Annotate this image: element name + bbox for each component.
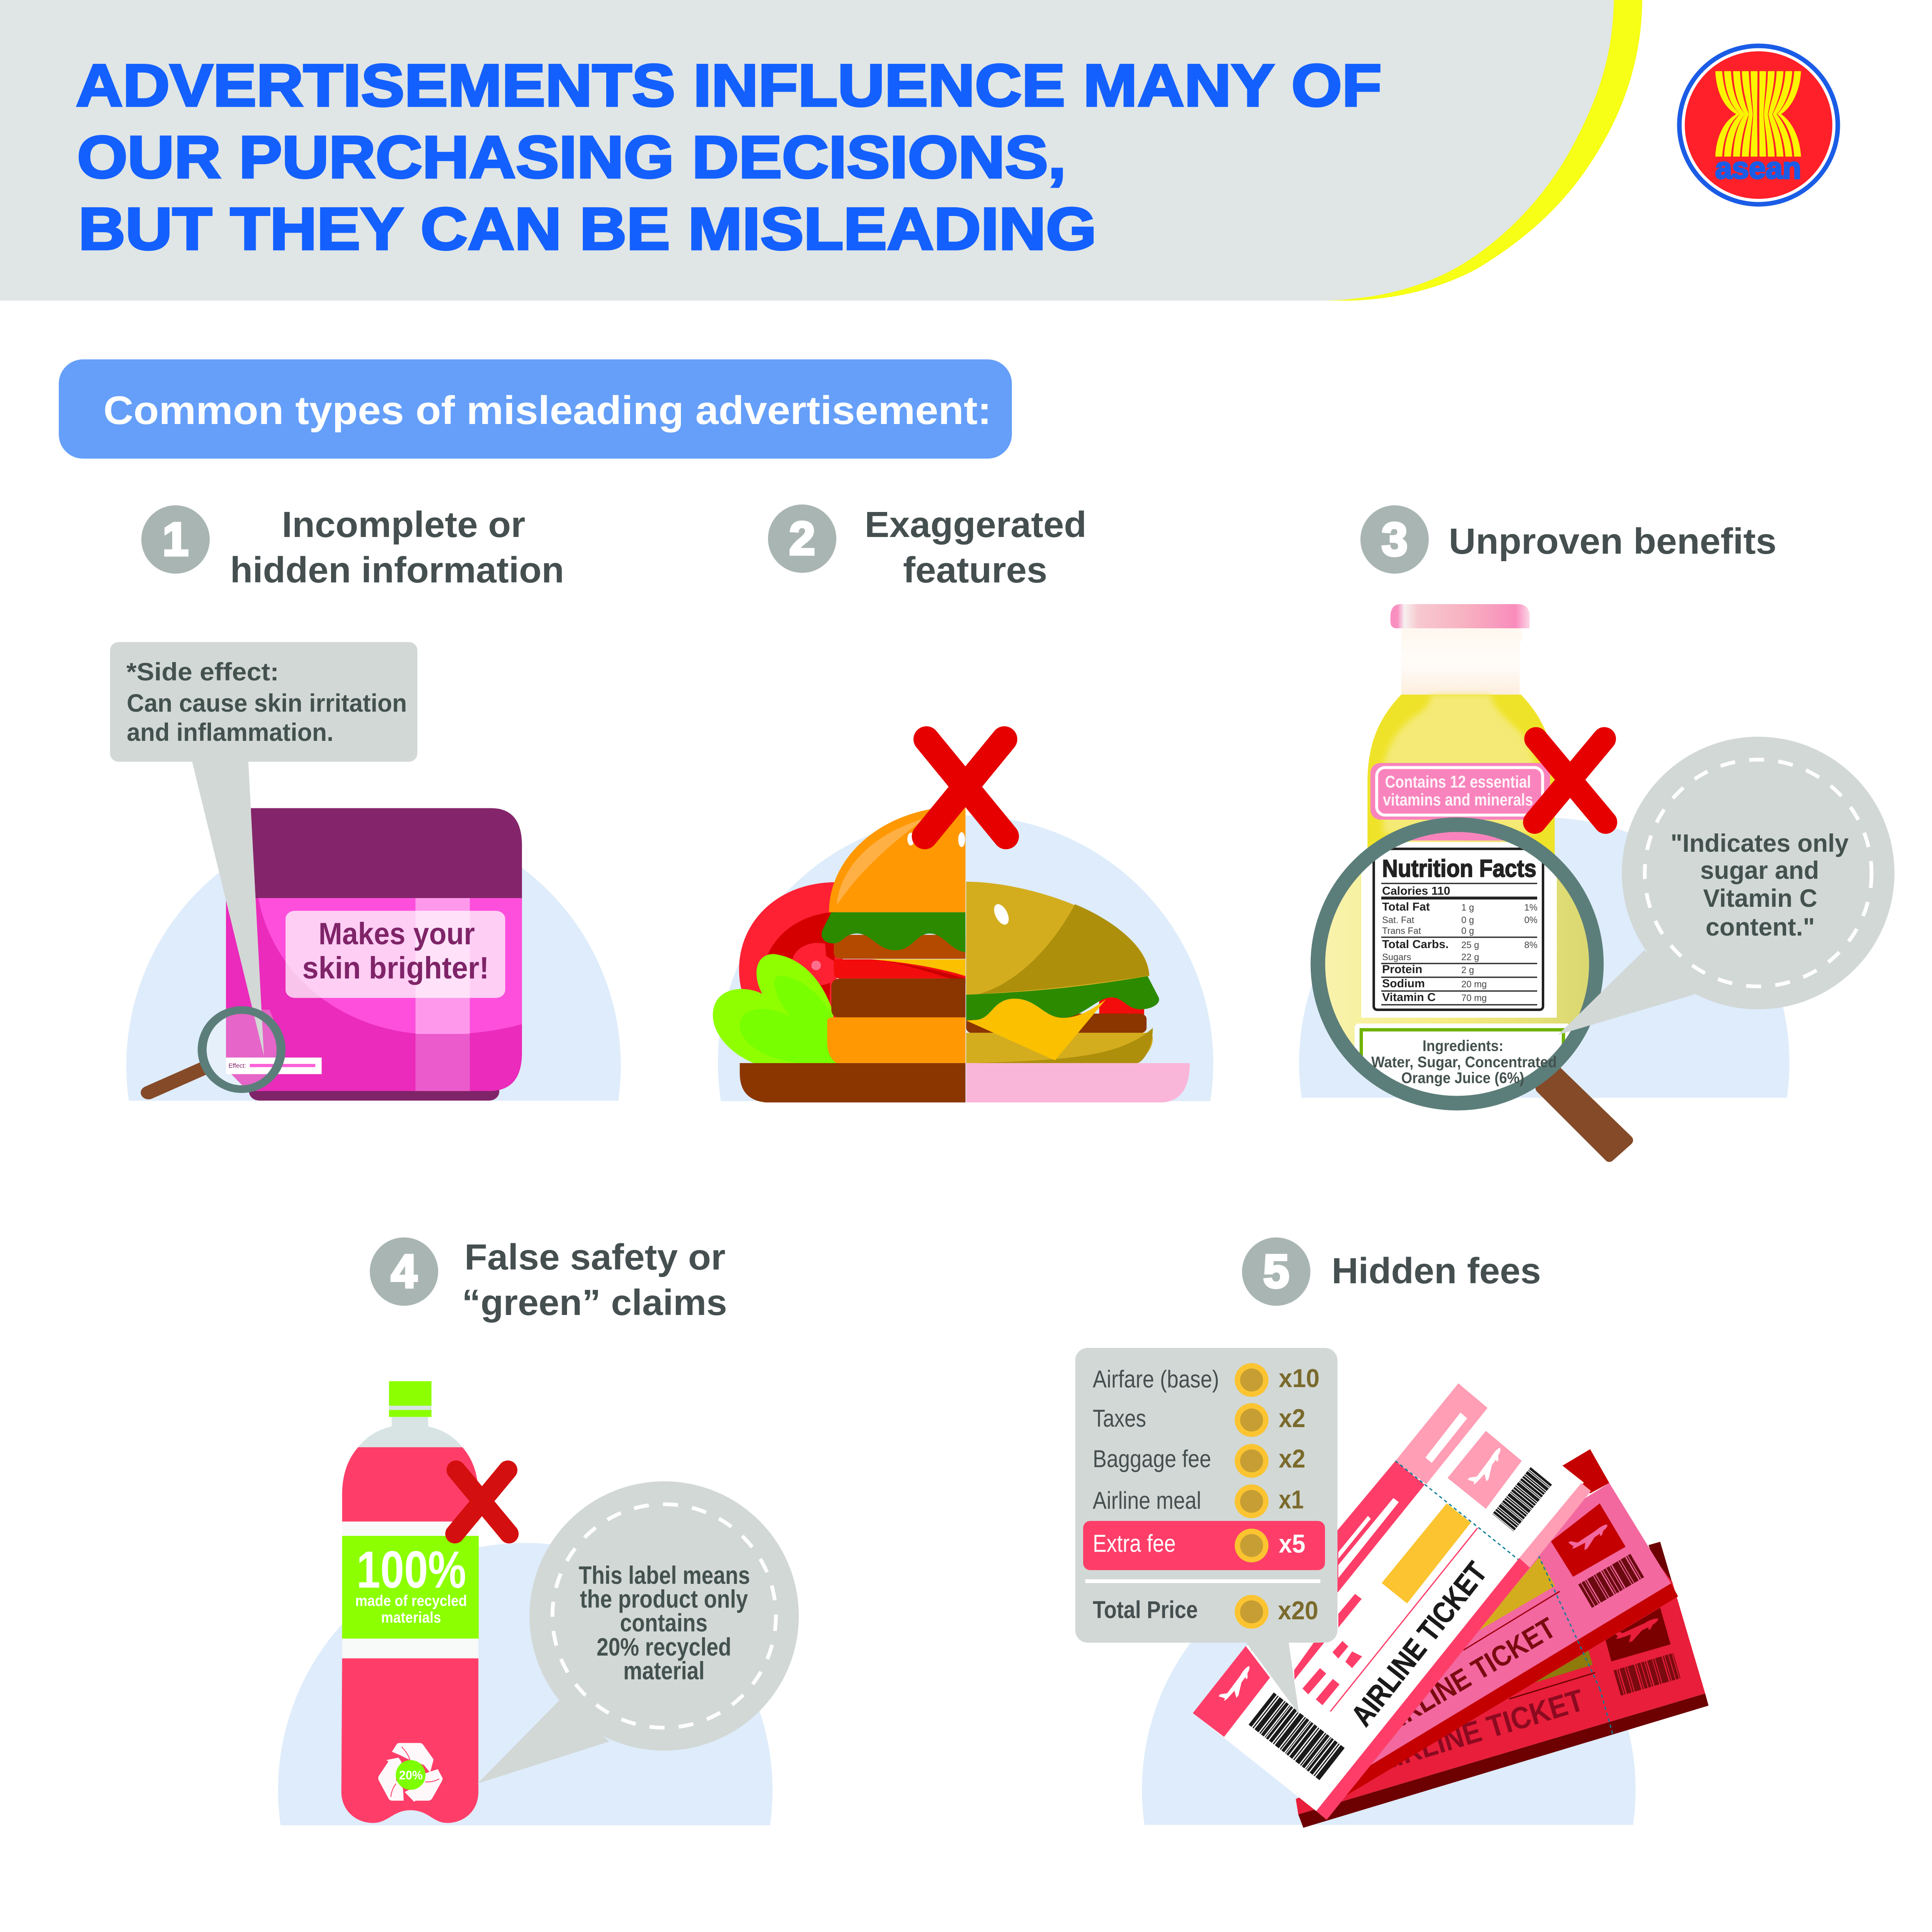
- magnifier lens contents: 1 g: [1461, 902, 1474, 913]
- fee rows: Taxes: [1093, 1405, 1146, 1432]
- panel: airline tickets illustration: [1075, 1348, 1709, 1828]
- magnifier lens contents: Calories 110: [1382, 884, 1450, 897]
- magnifier lens contents: Total Fat: [1382, 900, 1430, 913]
- callout: indicates only: sugar and: [1700, 856, 1819, 884]
- icon: recycle symbol: [378, 1743, 443, 1802]
- jar claim text: [302, 916, 489, 985]
- icon: magnifier ring: [1318, 825, 1596, 1103]
- fee rows: Baggage fee: [1093, 1445, 1211, 1473]
- title: ADVERTISEMENTS INFLUENCE MANY OF: [76, 53, 1382, 119]
- fee rows: Total Price: [1093, 1596, 1198, 1623]
- number badge 2: 2: [789, 512, 815, 565]
- icon: magnifier handle: [1541, 1071, 1628, 1157]
- icon: middle ticket: AIRLINE TICKET: [1372, 1611, 1561, 1741]
- fee rows: x10: [1279, 1364, 1320, 1393]
- callout: label means: material: [623, 1657, 705, 1685]
- icon: ASEAN logo: asean: [1715, 152, 1801, 185]
- fee rows: [1085, 1364, 1320, 1626]
- callout: indicates only: Vitamin C: [1703, 884, 1817, 912]
- icon: back ticket: AIRLINE TICKET: [1370, 1683, 1588, 1778]
- heading 1: Incomplete or: [282, 504, 525, 545]
- number badge 1: 1: [163, 513, 188, 565]
- icon: front ticket: AIRLINE TICKET: [1345, 1556, 1493, 1732]
- fee rows: x5: [1279, 1530, 1305, 1558]
- magnifier lens contents: Sodium: [1382, 977, 1425, 990]
- number badge 5: [1242, 1237, 1310, 1306]
- fee rows: x2: [1279, 1445, 1305, 1473]
- bottle label text: [355, 1541, 467, 1626]
- callout: label means: [477, 1481, 799, 1784]
- icon: red X: [455, 1470, 509, 1534]
- number badge 4: [370, 1237, 438, 1306]
- heading 1: [230, 504, 564, 590]
- section heading banner: [59, 359, 1012, 459]
- callout: label means: This label means: [579, 1561, 750, 1589]
- callout: indicates only: [1558, 737, 1894, 1035]
- icon: back ticket: [1296, 1542, 1709, 1828]
- panel: juice bottle illustration: [1299, 604, 1894, 1157]
- icon: juice bottle: [1367, 604, 1555, 1024]
- heading 3: Unproven benefits: [1449, 521, 1776, 562]
- heading 2: [865, 504, 1086, 590]
- fee rows: Airline meal: [1093, 1487, 1201, 1514]
- callout: side effect: [110, 642, 417, 762]
- bottle claim text: Contains 12 essential: [1385, 772, 1531, 791]
- callout: label means: the product only: [580, 1585, 748, 1613]
- heading 1: hidden information: [230, 550, 564, 590]
- icon: ASEAN logo: [1679, 46, 1838, 204]
- icon: red X: [1535, 739, 1606, 822]
- magnifier lens contents: 0%: [1524, 915, 1538, 925]
- icon: red X: [925, 739, 1006, 836]
- number badge 3: 3: [1382, 513, 1408, 565]
- bottle label text: made of recycled: [355, 1592, 467, 1609]
- magnifier lens contents: Sat. Fat: [1382, 915, 1414, 925]
- number badge 5: 5: [1263, 1245, 1289, 1297]
- panel: burger illustration: [713, 739, 1213, 1102]
- magnifier lens contents: Trans Fat: [1382, 926, 1421, 936]
- icon: recycle symbol: 20%: [399, 1769, 423, 1782]
- callout: side effect: Can cause skin irritation: [127, 689, 407, 717]
- magnifier lens contents: 2 g: [1461, 965, 1474, 975]
- panel: cosmetic jar illustration: Effect:: [228, 1062, 246, 1069]
- fee table callout: [1075, 1348, 1337, 1714]
- icon: plastic bottle: [341, 1381, 479, 1823]
- magnifier lens contents: 20 mg: [1461, 979, 1487, 989]
- number badge 4: 4: [391, 1245, 417, 1297]
- title: [76, 53, 1382, 262]
- callout: side effect: and inflammation.: [127, 718, 334, 746]
- heading 4: “green” claims: [462, 1282, 727, 1323]
- fee rows: Airfare (base): [1093, 1366, 1219, 1393]
- callout: indicates only: content.": [1706, 913, 1815, 941]
- magnifier lens contents: 0 g: [1461, 926, 1474, 936]
- number badge 1: [141, 505, 210, 574]
- bottle claim text: vitamins and minerals: [1383, 790, 1533, 809]
- panel: recycled bottle illustration: [278, 1381, 799, 1825]
- bottle label text: 100%: [356, 1541, 466, 1599]
- jar claim text: Makes your: [319, 916, 475, 951]
- magnifier lens contents: Protein: [1382, 963, 1422, 976]
- jar claim text: skin brighter!: [302, 951, 489, 985]
- magnifier lens contents: 70 mg: [1461, 993, 1487, 1003]
- section heading banner: Common types of misleading advertisement:: [103, 388, 991, 433]
- magnifier lens contents: Sugars: [1382, 952, 1411, 962]
- heading 5: Hidden fees: [1332, 1251, 1541, 1291]
- fee rows: Extra fee: [1093, 1530, 1176, 1557]
- magnifier lens contents: 0 g: [1461, 915, 1474, 925]
- heading 4: [462, 1237, 727, 1323]
- callout: label means: contains: [620, 1609, 708, 1637]
- fee rows: x20: [1278, 1596, 1318, 1625]
- magnifier lens contents: Vitamin C: [1382, 991, 1436, 1004]
- callout: label means: 20% recycled: [597, 1633, 731, 1661]
- bottle claim text: [1383, 772, 1533, 809]
- callout: indicates only: "Indicates only: [1671, 829, 1849, 857]
- extra fee highlight: [1083, 1521, 1325, 1570]
- number badge 2: [768, 504, 836, 573]
- magnifier lens contents: Total Carbs.: [1382, 938, 1449, 951]
- heading 2: features: [903, 550, 1047, 590]
- magnifier lens contents: 8%: [1524, 940, 1538, 950]
- magnifier lens contents: Nutrition Facts: [1382, 855, 1536, 882]
- heading 2: Exaggerated: [865, 504, 1086, 545]
- callout: side effect: *Side effect:: [126, 658, 279, 686]
- title: BUT THEY CAN BE MISLEADING: [78, 196, 1096, 262]
- ingredients text: Orange Juice (6%): [1401, 1069, 1524, 1086]
- fee rows: x1: [1279, 1485, 1304, 1514]
- header band: [0, 0, 1642, 301]
- panel: cosmetic jar illustration: [110, 642, 621, 1101]
- magnifier lens contents: 1%: [1524, 902, 1538, 913]
- magnifier lens contents: 25 g: [1461, 940, 1479, 950]
- ingredients text: Ingredients:: [1423, 1037, 1503, 1054]
- magnifier lens contents: 22 g: [1461, 952, 1479, 962]
- ingredients text: [1371, 1037, 1557, 1086]
- ingredients text: Water, Sugar, Concentrated: [1371, 1054, 1557, 1071]
- title: OUR PURCHASING DECISIONS,: [77, 124, 1066, 191]
- fee rows: x2: [1279, 1404, 1305, 1433]
- heading 4: False safety or: [464, 1237, 725, 1277]
- number badge 3: [1360, 505, 1429, 574]
- icon: front ticket: [1193, 1383, 1591, 1820]
- icon: middle ticket: [1330, 1449, 1678, 1805]
- bottle label text: materials: [381, 1609, 441, 1626]
- magnifier lens contents: [1315, 822, 1599, 1115]
